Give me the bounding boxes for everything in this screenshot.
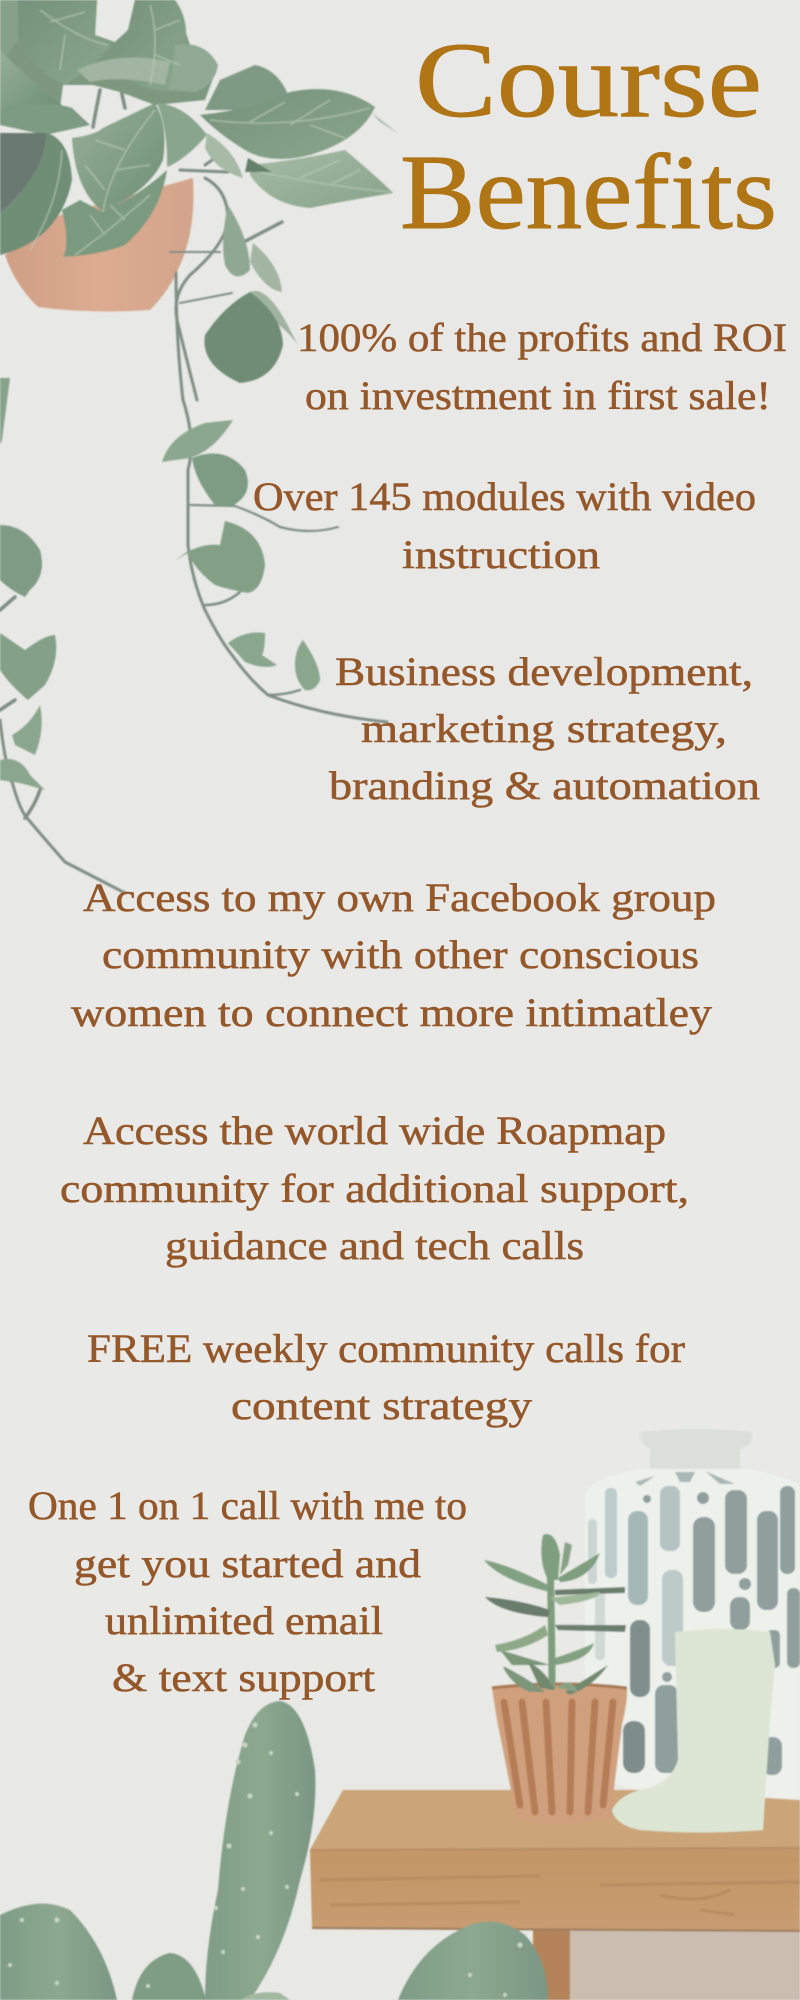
shelf leg [533,1928,570,2000]
leaf veins [30,5,390,255]
wooden shelf [310,1790,800,1931]
benefit: one on one call: One 1 on 1 call with me to [28,1483,467,1528]
leaf cluster centre [0,133,72,255]
benefit: one on one call: & text support [112,1655,375,1700]
leaf cluster top [15,0,112,85]
benefit: profits [297,315,787,418]
benefit: modules: instruction [402,532,600,577]
benefit: weekly calls [87,1326,685,1428]
benefit: weekly calls: FREE weekly community calls for [87,1326,685,1371]
wall below shelf [568,1928,800,2000]
benefit: one on one call: unlimited email [105,1598,383,1643]
benefit: profits: on investment in first sale! [305,373,771,418]
terracotta ribbed pot [492,1684,627,1824]
benefit: business development: marketing strategy, [361,706,727,751]
benefit: weekly calls: content strategy [231,1383,532,1428]
prickly pear cactus [0,1701,548,2000]
benefit: Facebook group [71,875,716,1035]
succulent [484,1534,626,1695]
benefit: modules: Over 145 modules with video [253,474,756,519]
benefit: Roapmap community: guidance and tech calls [165,1223,584,1268]
benefit: business development [329,649,760,808]
vine leaves [223,205,250,276]
ceramic boot [612,1629,775,1832]
benefit: Facebook group: Access to my own Facebook group [83,875,716,920]
foliage backing mass [0,0,218,108]
benefit: profits: 100% of the profits and ROI [297,315,787,360]
benefit: modules [253,474,756,577]
hanging plant illustration [0,0,398,893]
benefit: business development: branding & automation [329,763,760,808]
trailing vine stems [0,85,387,893]
benefit: business development: Business development, [335,649,753,694]
benefit: one on one call: get you started and [74,1541,421,1586]
benefit: one on one call [28,1483,467,1700]
benefit: Roapmap community [60,1108,689,1268]
title [400,22,777,252]
terracotta hanging pot [5,178,193,311]
shelf still life [0,1429,800,2000]
title: Benefits [400,134,777,252]
title: Course [415,22,762,140]
benefit: Facebook group: community with other conscious [102,932,699,977]
foliage [0,0,398,790]
leaf cluster right [250,150,393,208]
benefit: Facebook group: women to connect more intimatley [71,990,712,1035]
painted vase [585,1429,800,1800]
benefit: Roapmap community: community for additional support, [60,1166,689,1211]
white bowl [773,1668,800,1775]
benefit: Roapmap community: Access the world wide Roapmap [83,1108,666,1153]
